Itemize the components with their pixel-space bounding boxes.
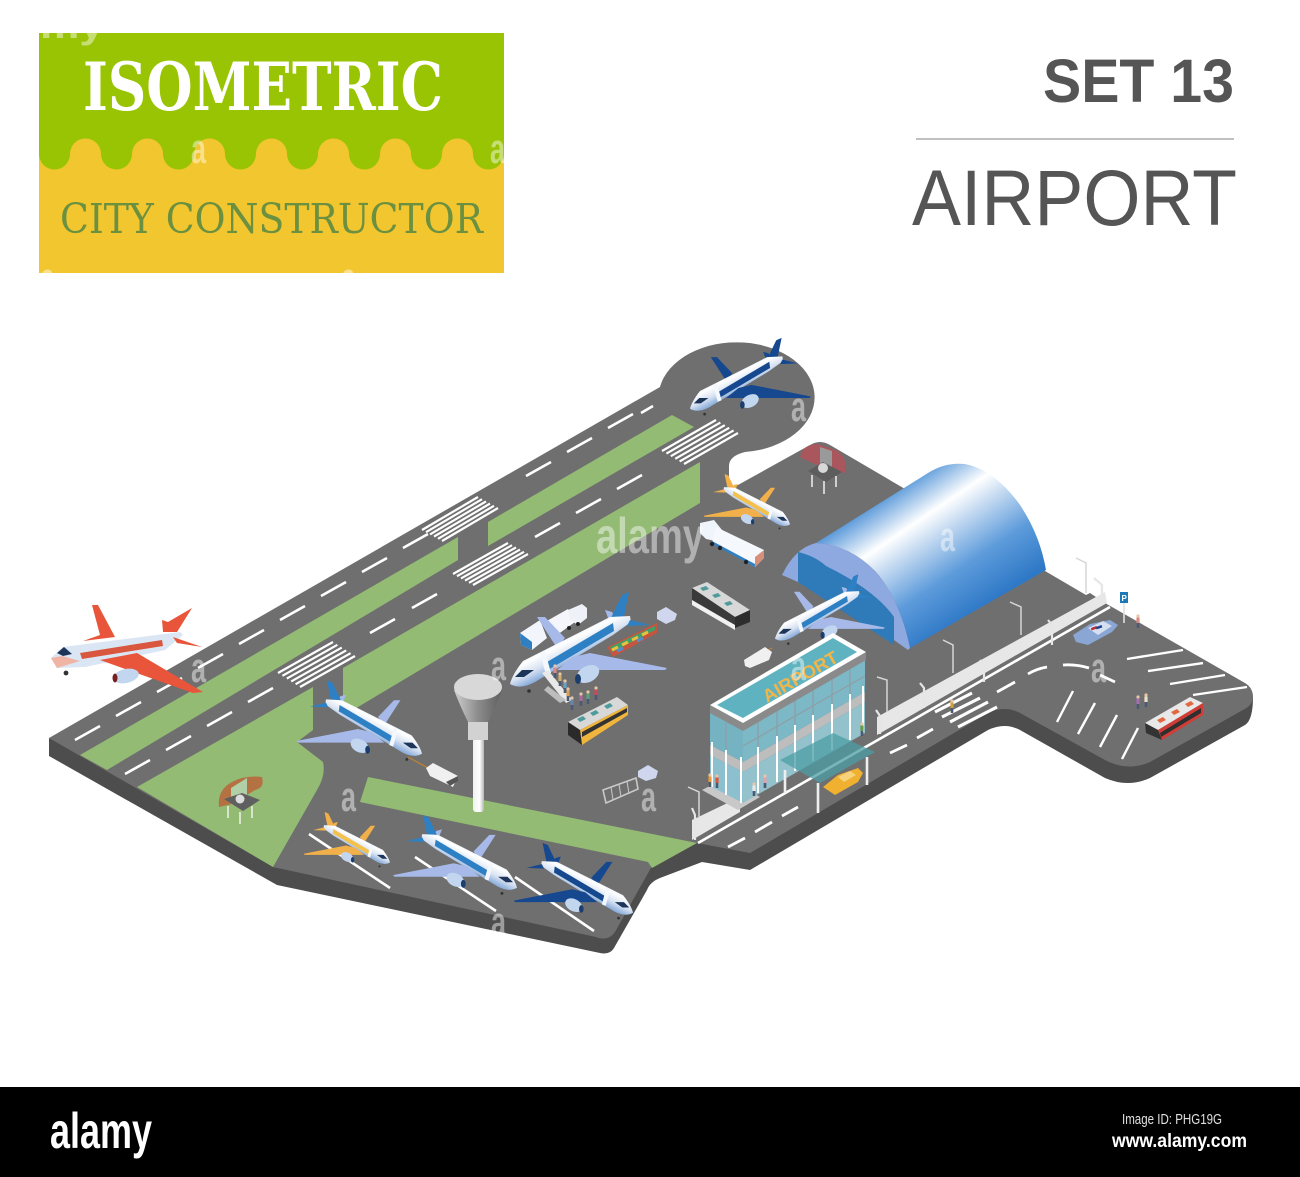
airport ground platform <box>49 342 1253 953</box>
baggage tug <box>657 607 677 624</box>
watermarks <box>191 125 1106 945</box>
banner clipped watermark fragments <box>42 33 354 273</box>
terminal roof edge <box>710 705 743 731</box>
terminal right glass <box>743 660 865 762</box>
glass canopy <box>780 733 875 783</box>
terminal columns <box>712 686 863 803</box>
pedestrian crossing <box>935 693 997 727</box>
tower top <box>454 674 502 700</box>
terminal mullions <box>726 669 865 752</box>
heading: airport: AIRPORT <box>912 153 1237 242</box>
lamp posts <box>688 558 1086 818</box>
tow tug, terminal <box>744 647 772 668</box>
fence, right section <box>877 592 1107 735</box>
airport terminal <box>702 633 875 813</box>
footer website: www.alamy.com <box>1111 1131 1247 1152</box>
parking sign: P <box>1122 594 1128 603</box>
centre plane at stairs <box>510 592 667 693</box>
hangar roof <box>816 464 1046 648</box>
red plane stabilizer <box>173 637 202 647</box>
parking sign <box>1120 592 1128 623</box>
footer image id: Image ID: PHG19G <box>1122 1111 1222 1128</box>
zebra crossing at upper taxiway <box>422 497 498 541</box>
control tower <box>454 674 502 812</box>
hangar front arch <box>782 543 910 650</box>
red plane far wing <box>162 608 192 632</box>
tower funnel <box>454 690 502 722</box>
truck cab <box>568 604 587 625</box>
plane on lower taxiway <box>296 680 422 761</box>
footer bar <box>0 1087 1300 1177</box>
truck tank <box>545 609 575 635</box>
watermarks: a <box>1091 644 1106 691</box>
icon: green radar table <box>219 777 263 824</box>
banner clipped watermark fragments: my <box>40 5 104 46</box>
truck rear box <box>520 620 547 650</box>
parking stand lines <box>309 834 594 931</box>
passengers at stairs <box>553 664 598 710</box>
hangar <box>782 464 1046 650</box>
road markings <box>698 607 1247 847</box>
runway markings <box>75 406 738 931</box>
white apron bus <box>692 582 750 630</box>
canopy posts <box>785 757 867 813</box>
banner: isometric city constructor <box>39 33 504 273</box>
lower-mid blue plane <box>393 815 517 895</box>
red plane fuselage <box>51 632 183 668</box>
police car <box>1073 620 1118 645</box>
plane at hangar door <box>775 574 885 645</box>
red bus <box>1145 697 1203 740</box>
watermarks: a <box>491 898 506 945</box>
zebra crossing at middle taxiway <box>453 543 528 585</box>
banner clipped watermark fragments: a <box>40 254 55 301</box>
grass beside apron <box>343 462 700 716</box>
runway centre dashes <box>75 406 653 774</box>
watermarks: a <box>191 125 206 172</box>
fuel truck by centre plane <box>520 604 587 650</box>
platform side faces <box>49 697 1253 953</box>
grass strip above parking <box>360 777 697 868</box>
baggage train <box>607 607 677 657</box>
red plane landing <box>51 605 203 693</box>
red plane near wing <box>100 653 203 693</box>
road dashes <box>728 665 1115 847</box>
large lawn <box>137 687 324 867</box>
tower shaft <box>473 738 484 812</box>
watermarks: a <box>791 642 806 689</box>
watermarks: a <box>341 773 356 820</box>
watermarks: a <box>791 383 806 430</box>
terminal visitors <box>708 722 864 796</box>
tower collar <box>468 720 488 740</box>
terminal roof sign: AIRPORT <box>759 647 842 706</box>
banner yellow wave panel <box>39 138 504 273</box>
terminal roof <box>710 633 866 723</box>
banner subtitle: CITY CONSTRUCTOR <box>60 195 484 243</box>
heading: set number: SET 13 <box>1043 47 1234 115</box>
yellow bus <box>568 697 628 745</box>
watermarks: a <box>191 644 206 691</box>
parking bay lines <box>1057 650 1247 759</box>
green areas <box>80 415 700 868</box>
banner title: ISOMETRIC <box>83 48 443 126</box>
watermark: alamy: alamy <box>596 508 704 564</box>
grass strip between runways, lower <box>80 537 458 770</box>
tow tug, left <box>408 757 458 787</box>
fence, left section <box>692 797 740 840</box>
fence posts <box>692 578 1102 840</box>
hangar opening <box>798 552 894 645</box>
baggage cart and tug, lower <box>603 765 658 803</box>
platform top surface <box>49 342 1253 939</box>
zebra crossing at turning circle <box>662 420 738 464</box>
road edge line <box>698 607 1110 843</box>
watermarks: a <box>641 773 656 820</box>
banner green panel <box>39 33 504 273</box>
plane on turning circle <box>690 338 811 416</box>
fuel truck by hangar <box>700 520 764 567</box>
yellow plane by hangar <box>704 474 790 529</box>
perimeter fence <box>688 558 1107 840</box>
footer logo: alamy <box>50 1103 152 1159</box>
grass strip between runways, upper <box>488 415 694 546</box>
lower-left yellow plane <box>304 812 390 867</box>
taxi <box>823 768 863 795</box>
zebra crossing at lower taxiway <box>278 642 355 687</box>
banner clipped watermark fragments: a <box>341 254 356 301</box>
icon: red radar table <box>800 444 846 494</box>
terminal ground step <box>702 778 760 810</box>
red plane fin <box>83 605 115 641</box>
people in parking lot <box>950 614 1148 713</box>
lower-right dark blue plane <box>514 843 633 919</box>
watermarks: a <box>491 642 506 689</box>
watermarks: a <box>490 125 505 172</box>
watermarks: a <box>940 513 955 560</box>
red plane engine <box>112 666 140 686</box>
boarding stairs <box>542 670 572 703</box>
terminal left glass <box>710 713 743 762</box>
